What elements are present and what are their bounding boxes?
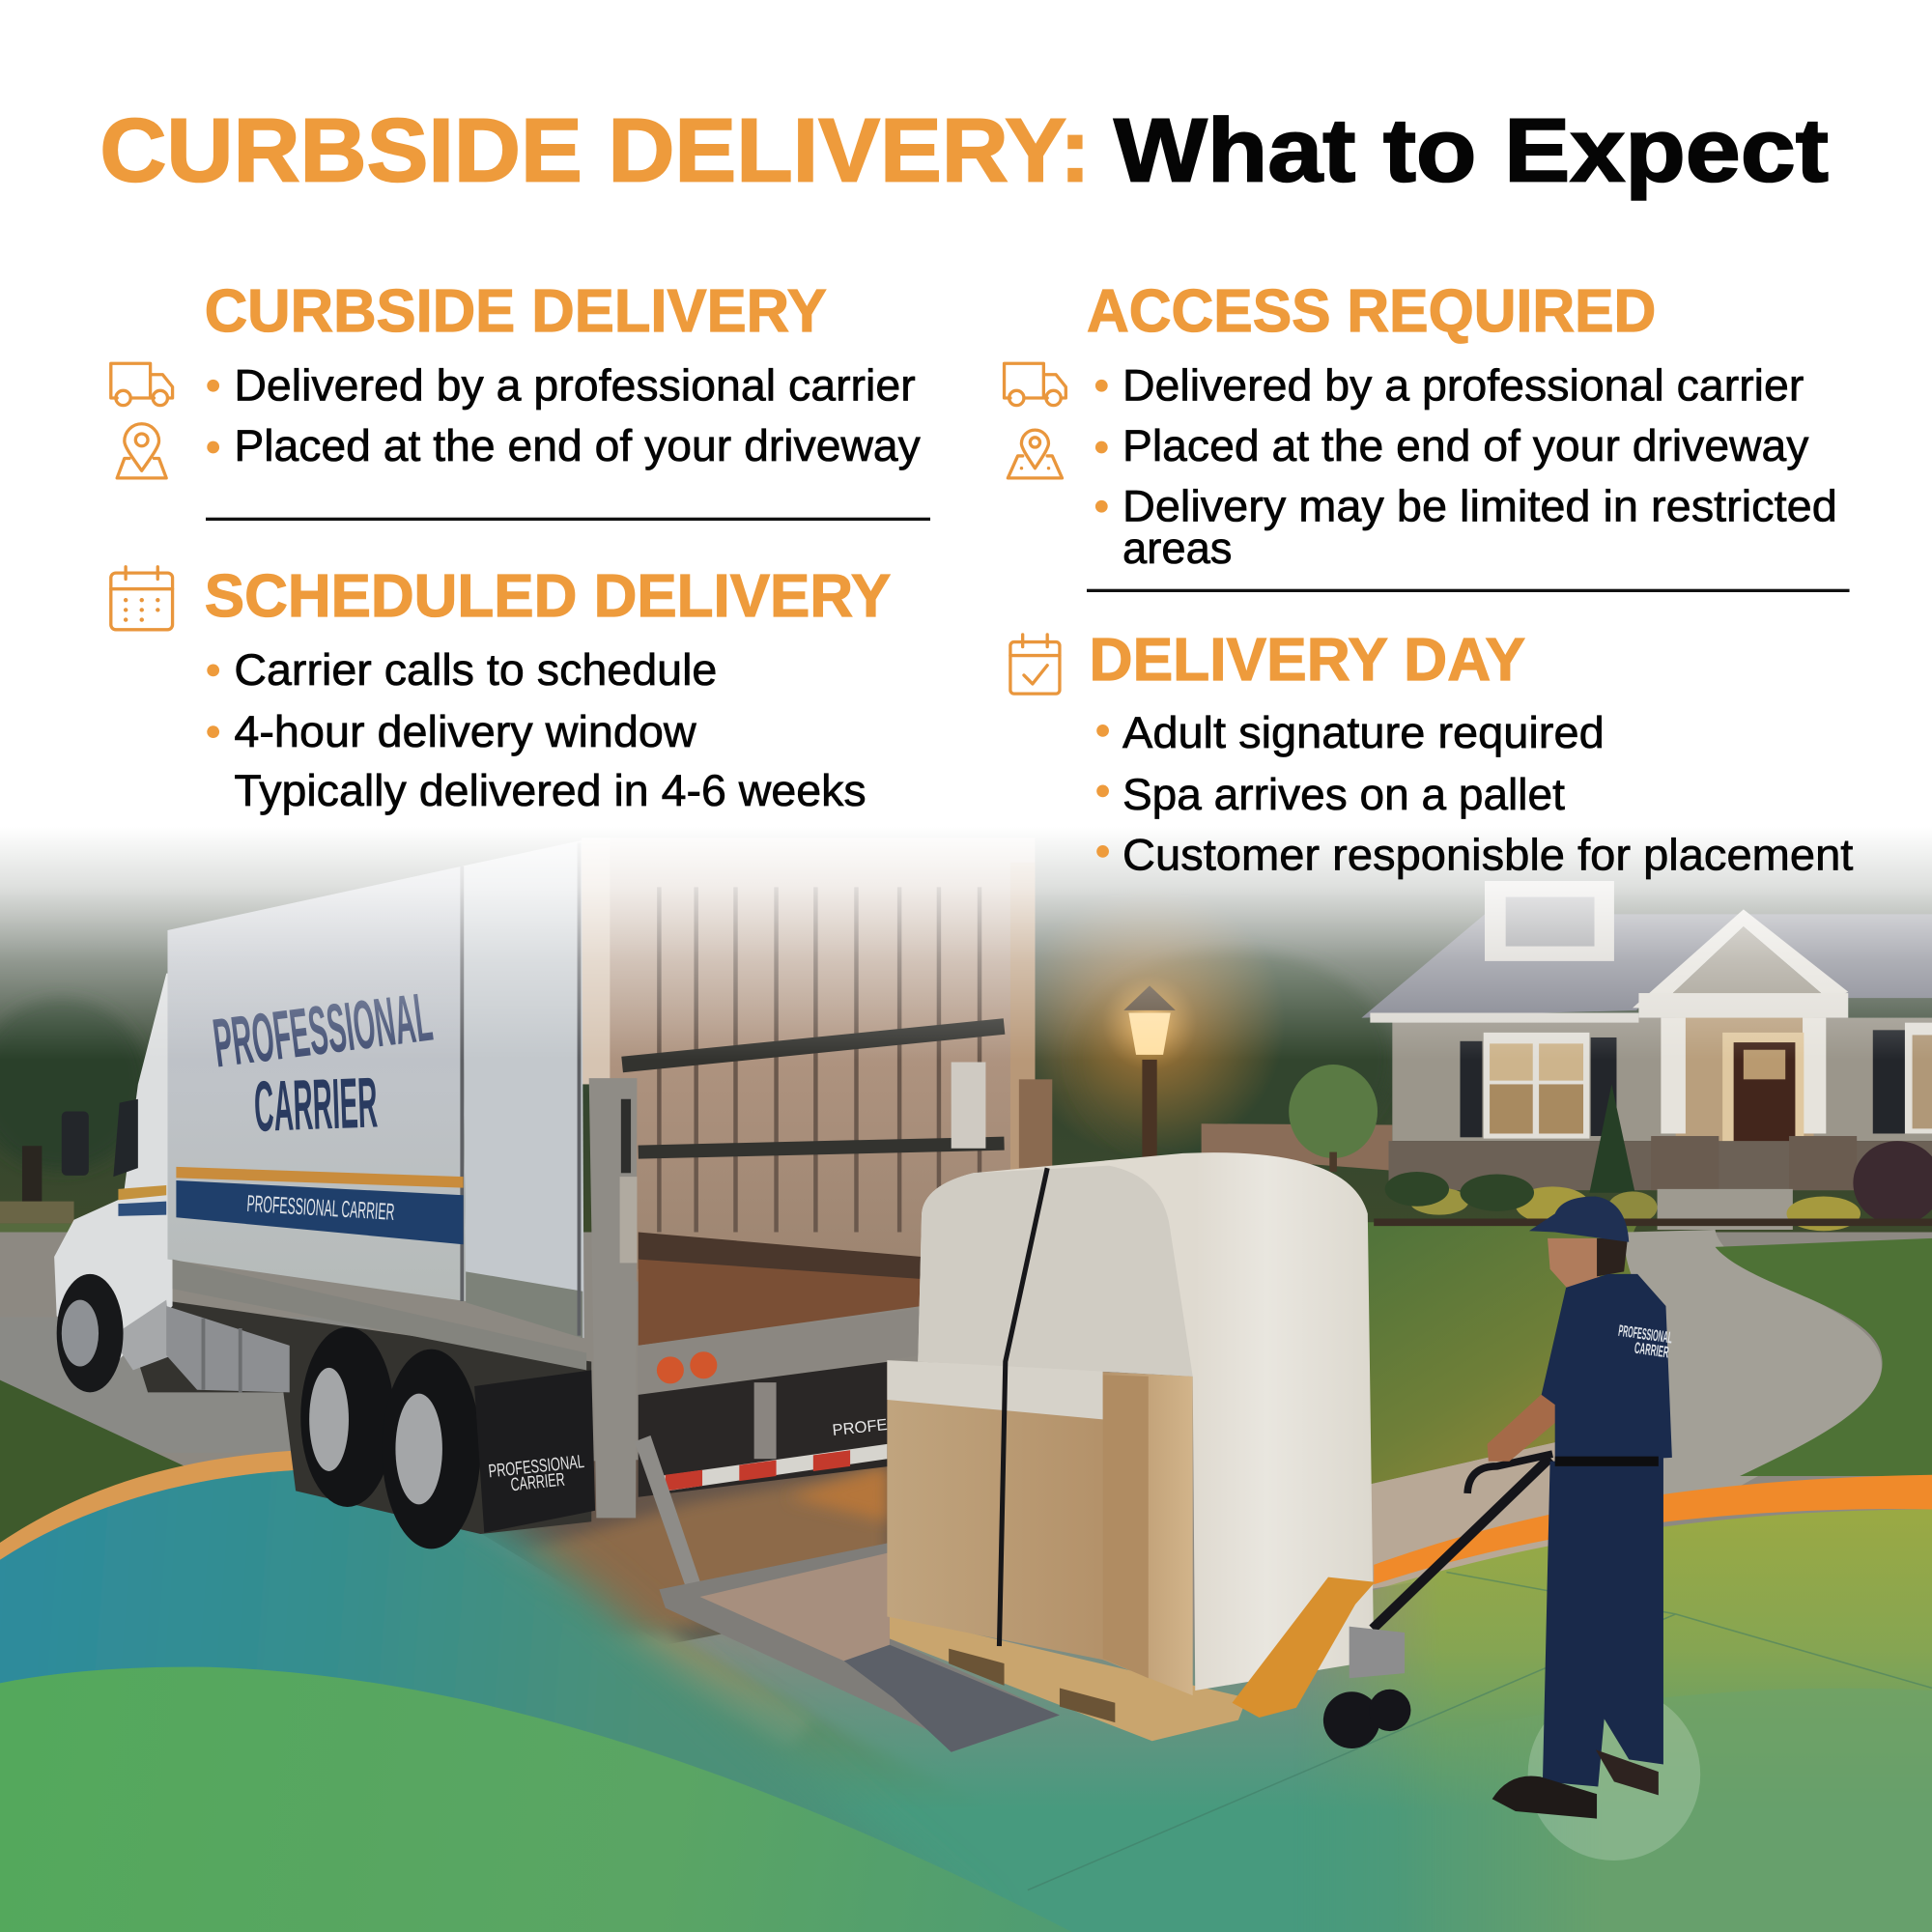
bullet list: Delivery may be limited in restricted (1122, 480, 1837, 531)
bullet list: Customer responisble for placement (1122, 829, 1853, 880)
heading: access required: ACCESS REQUIRED (1087, 278, 1656, 345)
undercarriage: PROFESS (832, 1412, 910, 1439)
bullet list: Delivered by a professional carrier (234, 359, 916, 411)
bullet list: Placed at the end of your driveway (234, 420, 921, 470)
title: CURBSIDE DELIVERY: (99, 101, 1091, 201)
bullet list: Typically delivered in 4-6 weeks (234, 765, 867, 815)
truck signage: CARRIER (253, 1063, 379, 1147)
bullet list: Delivered by a professional carrier (1122, 359, 1804, 411)
small tree (1289, 1065, 1378, 1172)
truck signage: PROFESSIONAL CARRIER (246, 1191, 395, 1226)
liftgate post (589, 1078, 637, 1518)
icon: map pin (117, 424, 166, 478)
rear wheels (300, 1327, 480, 1548)
cardboard base (887, 1360, 1193, 1695)
shoe glow (1528, 1688, 1700, 1861)
mud flap (474, 1370, 595, 1533)
icon: map pin (1008, 430, 1062, 478)
wrapped spa (918, 1152, 1374, 1690)
cab (54, 974, 173, 1370)
panel: delivery day (1010, 627, 1853, 880)
panel: curbside delivery (111, 278, 921, 478)
orange arc left (0, 1450, 301, 1560)
bullet list: Carrier calls to schedule (234, 644, 717, 695)
strap (999, 1168, 1047, 1646)
scene: delivery photo (0, 801, 1932, 1932)
bullet list (207, 644, 867, 815)
teal curve left (0, 1470, 825, 1816)
delivery worker: CARRIER (1634, 1338, 1670, 1361)
truck interior wall (582, 838, 1052, 1293)
pavement seams (1028, 1573, 1932, 1890)
olive curve right (1321, 1509, 1932, 1800)
under body shadow (117, 1293, 591, 1534)
front wheel (57, 1274, 124, 1392)
bullet list (1096, 707, 1853, 880)
mud flap: CARRIER (510, 1469, 566, 1495)
icon: calendar check (1010, 635, 1060, 694)
panel: access required (1005, 278, 1837, 573)
undercarriage (639, 1361, 910, 1497)
pallet jack (1233, 1454, 1552, 1748)
heading: delivery day: DELIVERY DAY (1090, 627, 1525, 694)
lift ramp (635, 1435, 1060, 1752)
house (1361, 881, 1932, 1231)
icon: calendar (111, 567, 173, 630)
bullet list: Spa arrives on a pallet (1122, 769, 1565, 819)
fence (1202, 1123, 1392, 1171)
bullet list (207, 359, 921, 470)
box side panel (167, 867, 466, 1301)
pallet (890, 1614, 1247, 1741)
icon: truck (1005, 363, 1065, 406)
ground and driveway (0, 1233, 1932, 1932)
frame rail (173, 1260, 586, 1370)
panel: scheduled delivery (111, 563, 891, 815)
truck: PROFESSIONAL (209, 978, 437, 1082)
truck (54, 838, 1052, 1548)
coloured ground overlays (0, 1451, 1932, 1932)
street lamp (1014, 887, 1285, 1158)
front lawn and walkway (1355, 1218, 1932, 1589)
icon: truck (111, 363, 173, 406)
fuel tank (166, 1306, 290, 1392)
bullet list (1095, 359, 1837, 573)
scene: delivery photo: PROFESSIONAL (1617, 1321, 1673, 1347)
bullet list: Placed at the end of your driveway (1122, 420, 1808, 470)
trees behind truck and house (0, 801, 1932, 1318)
title: What to Expect (1114, 101, 1829, 201)
bullet list: 4-hour delivery window (234, 706, 697, 756)
green curve right (1466, 1689, 1932, 1932)
rear sill and lights (639, 1309, 922, 1395)
truck signage (176, 978, 464, 1244)
delivery worker (1488, 1197, 1673, 1819)
mud flap: PROFESSIONAL (488, 1451, 585, 1482)
heading: curbside delivery: CURBSIDE DELIVERY (205, 278, 827, 345)
white fade over photo (0, 788, 1932, 1060)
box door panel (462, 840, 584, 1338)
bullet list: areas (1122, 523, 1233, 573)
orange arc right (1374, 1475, 1932, 1584)
bullet list: Adult signature required (1122, 707, 1605, 757)
green curve left (0, 1667, 1072, 1932)
title (99, 101, 1829, 201)
heading: scheduled delivery: SCHEDULED DELIVERY (205, 563, 891, 630)
truck floor (639, 1260, 922, 1346)
